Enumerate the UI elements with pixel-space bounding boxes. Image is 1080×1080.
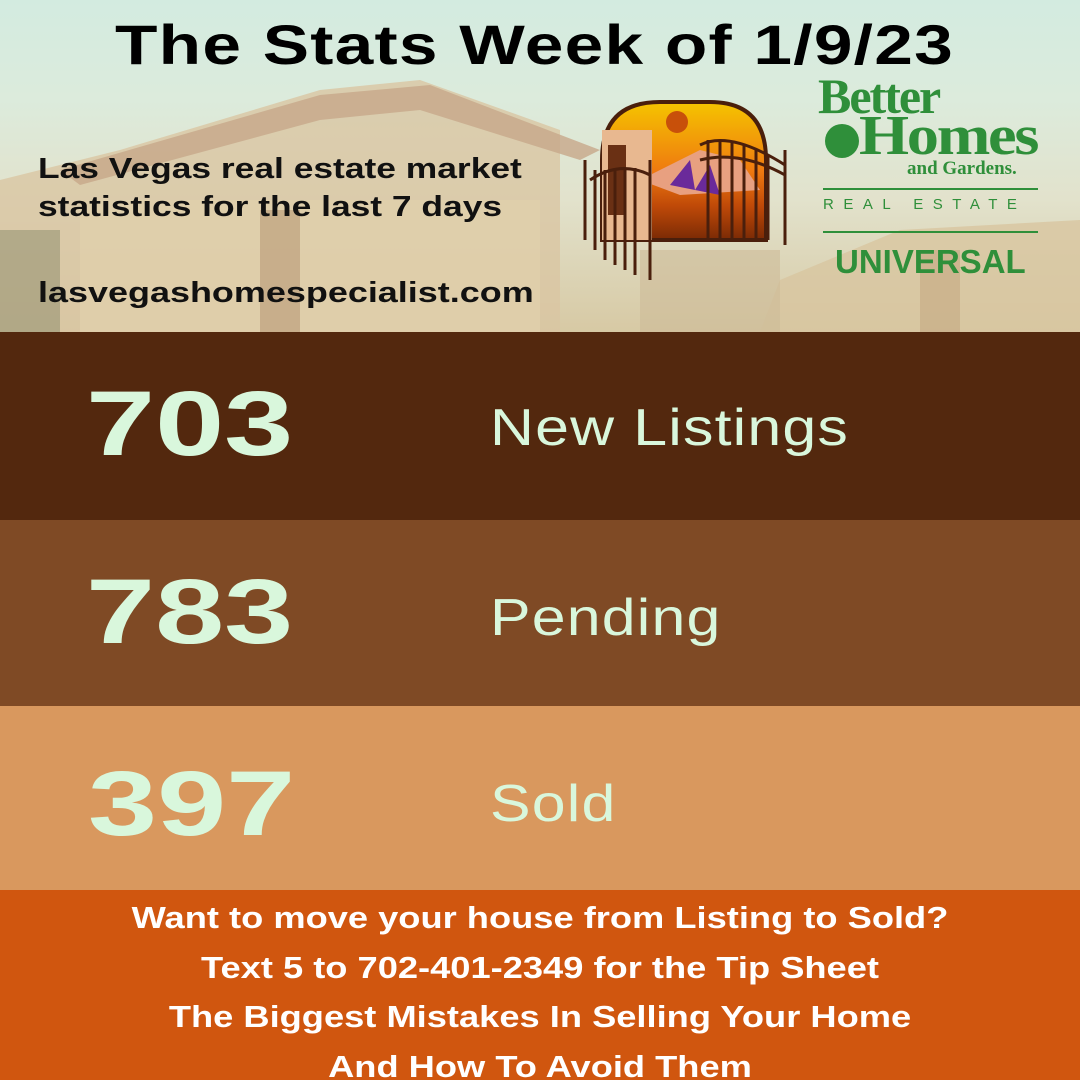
label: Sold: Sold (490, 775, 616, 833)
subtitle text (38, 153, 522, 223)
logo: Better Homes and Gardens Universal: UNIVERSAL (835, 243, 1026, 280)
logo: Better Homes and Gardens Universal: and Gardens. (907, 158, 1017, 179)
number: 703: 703 (86, 373, 293, 475)
number: 397: 397 (88, 753, 295, 855)
footer call to action (0, 890, 1080, 1080)
number: 783: 783 (86, 561, 293, 663)
subtitle text: Las Vegas real estate market (38, 153, 522, 185)
logo: Better Homes and Gardens Universal: REAL ESTATE (823, 196, 1026, 213)
subtitle text: statistics for the last 7 days (38, 191, 502, 223)
logo: Better Homes and Gardens Universal: Better (818, 68, 939, 124)
footer call to action: The Biggest Mistakes In Selling Your Home (169, 999, 911, 1034)
footer call to action: Want to move your house from Listing to Sold? (132, 900, 948, 935)
footer call to action: Text 5 to 702-401-2349 for the Tip Sheet (201, 950, 879, 984)
panel: sold (0, 706, 1080, 890)
logo: Better Homes and Gardens Universal (818, 68, 1038, 280)
label: New Listings: New Listings (490, 399, 849, 457)
website url: lasvegashomespecialist.com (38, 277, 534, 309)
header background photo (0, 0, 1080, 332)
panel: new listings (0, 332, 1080, 520)
panel: pending (0, 520, 1080, 706)
icon: gate logo (584, 100, 786, 280)
label: Pending: Pending (490, 589, 721, 647)
logo: Better Homes and Gardens Universal: Homes (859, 105, 1037, 167)
title: The Stats Week of 1/9/23 (115, 13, 954, 76)
